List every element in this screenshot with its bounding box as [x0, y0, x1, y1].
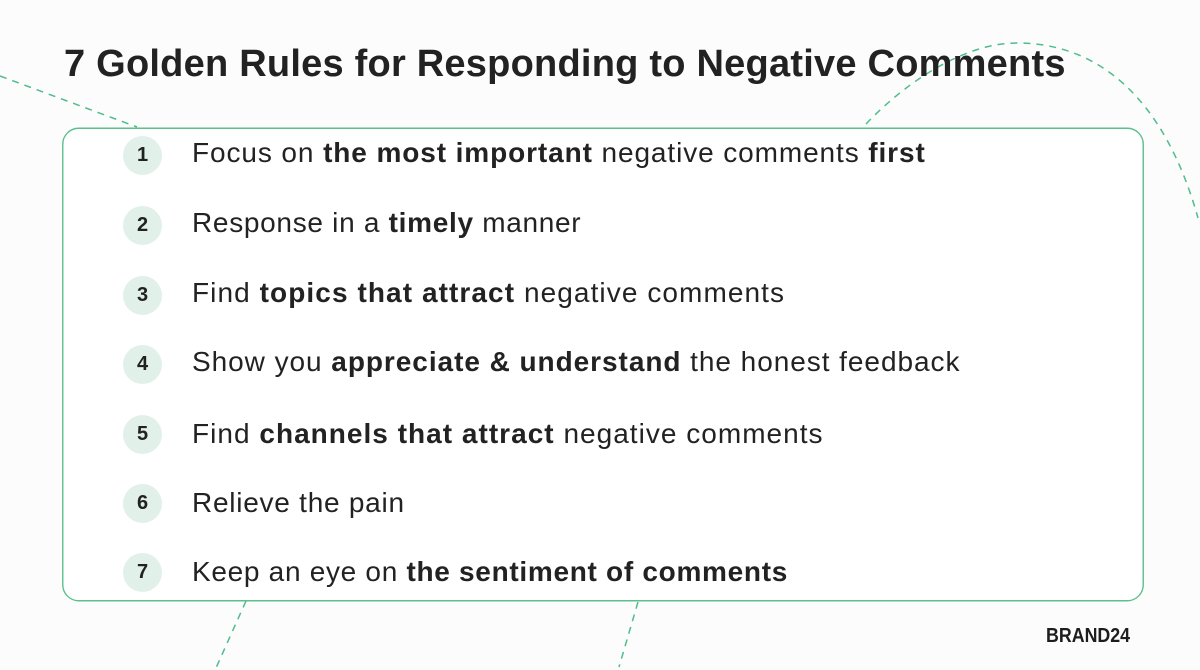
rule 6 text: Relieve the pain [192, 487, 405, 518]
rule 2 number: 2 [137, 214, 148, 236]
rule 4 text: Show you appreciate & understand the honest feedback [192, 346, 960, 377]
title: 7 Golden Rules for Responding to Negative Comments [64, 43, 1066, 85]
rule 5 number [123, 415, 162, 454]
rule 7 text: Keep an eye on the sentiment of comments [192, 556, 788, 587]
rule 4 number [123, 345, 162, 384]
rule 5 text: Find channels that attract negative comments [192, 418, 824, 449]
rule 1 number [123, 136, 162, 175]
rule 7 number [123, 553, 162, 592]
rule 3 number: 3 [137, 284, 148, 306]
rule 1 text: Focus on the most important negative comments first [192, 137, 926, 168]
rule 4 number: 4 [137, 353, 148, 375]
rule 3 text: Find topics that attract negative comments [192, 277, 785, 308]
rule 5 number: 5 [137, 423, 148, 445]
rule 2 number [123, 206, 162, 245]
rule 7 number: 7 [137, 561, 148, 583]
rule 6 number [123, 484, 162, 523]
rule 2 text: Response in a timely manner [192, 207, 581, 238]
logo: BRAND24: BRAND24 [1046, 625, 1130, 647]
rule 1 number: 1 [137, 144, 148, 166]
rule 6 number: 6 [137, 492, 148, 514]
rule 3 number [123, 276, 162, 315]
